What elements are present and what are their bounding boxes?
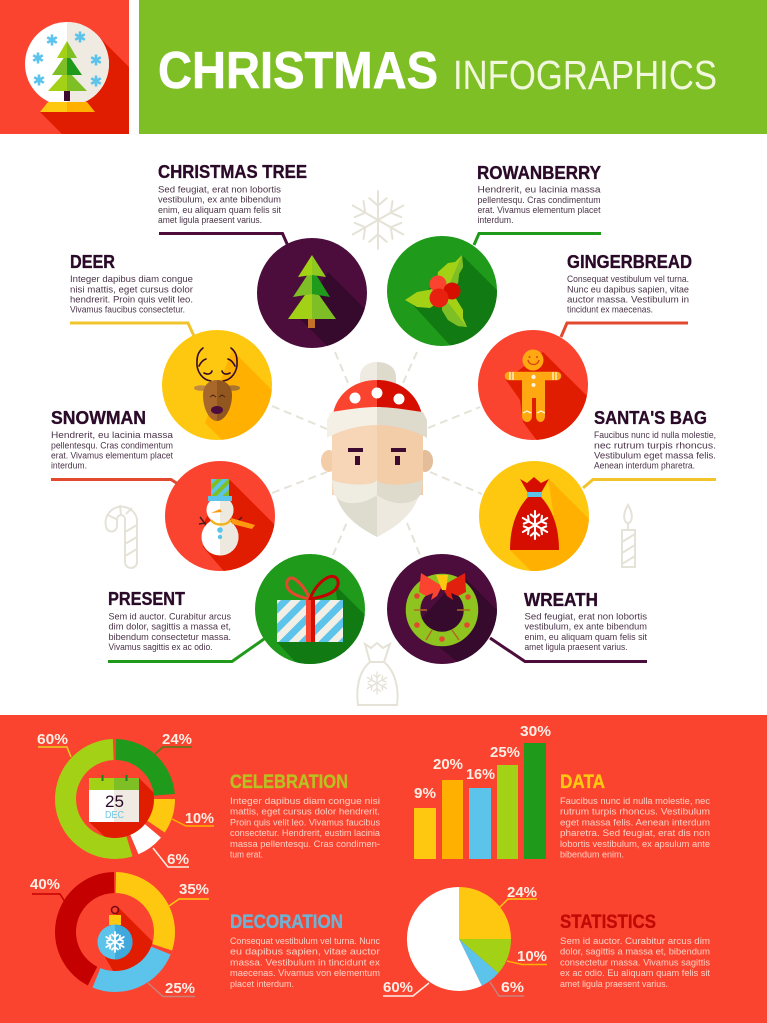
node: christmas tree <box>158 164 367 348</box>
text: decoration <box>230 911 381 990</box>
text block <box>478 185 601 226</box>
text: statistics: Sem id auctor. Curabitur arcus dim <box>560 936 710 947</box>
outline icon: candy cane <box>106 505 137 568</box>
text: data: bibendum enim. <box>560 850 624 860</box>
leader <box>583 480 716 488</box>
text: celebration: mattis, eget cursus dolor hendrerit. <box>230 807 380 818</box>
text: celebration: Integer dapibus diam congue nisi <box>230 796 380 807</box>
labels: 24% <box>507 885 537 901</box>
bar chart: data: 20% <box>433 757 463 773</box>
text block: amet ligula praesent varius. <box>158 215 262 226</box>
text block: Vivamus faucibus consectetur. <box>70 305 185 316</box>
bar chart: data: 9% <box>414 786 436 802</box>
text: data: rutrum turpis rhoncus. Vestibulum <box>560 807 710 818</box>
text block: Hendrerit, eu lacinia massa <box>478 185 601 196</box>
text block: Sed feugiat, erat non lobortis <box>158 184 281 196</box>
santa face <box>321 362 433 537</box>
text block: nec rutrum turpis rhoncus. <box>594 440 716 451</box>
heading: PRESENT <box>108 588 186 609</box>
leader <box>70 323 194 336</box>
header: title banner <box>139 0 767 134</box>
text: celebration: tum erat. <box>230 850 263 860</box>
text block: bibendum consectetur massa. <box>108 632 231 643</box>
text block: Consequat vestibulum vel turna. <box>567 274 689 285</box>
text: statistics: amet ligula praesent varius. <box>560 979 668 990</box>
labels: 6% <box>501 980 524 996</box>
pom-pom <box>360 362 377 392</box>
text block: Aenean interdum pharetra. <box>594 461 695 472</box>
icon: gingerbread man <box>509 350 557 422</box>
icon: calendar <box>89 775 139 822</box>
heading: DEER <box>70 251 115 272</box>
text: statistics: dolor, sagittis a massa et, bibendum <box>560 947 710 958</box>
donut chart: celebration <box>38 734 214 868</box>
labels <box>383 885 547 996</box>
header: title banner: INFOGRAPHICS <box>453 52 717 98</box>
dashed connectors <box>272 352 482 555</box>
text block: vestibulum, ex ante bibendum <box>524 622 647 633</box>
text: decoration: Consequat vestibulum vel turna. Nunc <box>230 936 380 947</box>
text block: amet ligula praesent varius. <box>524 642 628 653</box>
text: celebration: CELEBRATION <box>230 771 348 793</box>
node: deer <box>70 254 272 440</box>
icon: gift box <box>277 576 343 642</box>
text: statistics: consectetur massa. Vivamus sagittis <box>560 957 710 968</box>
icon: holly <box>405 255 467 327</box>
bar chart: data: 16% <box>466 767 495 783</box>
bar chart: data: 30% <box>520 724 551 740</box>
text block <box>51 430 174 472</box>
text: data: eget massa felis. Aenean interdum <box>560 817 710 828</box>
text: statistics: ex ac odio. Eu aliquam quam felis sit <box>560 968 710 979</box>
text: data: pharetra. Sed feugiat, erat dis non <box>560 828 710 839</box>
title: CHRISTMAS <box>158 42 438 100</box>
text: decoration: eu dapibus sapien, vitae auctor <box>230 947 381 958</box>
labels <box>30 877 209 997</box>
text: celebration: Proin quis velit leo. Vivamus faucibus <box>230 817 380 828</box>
labels: 10% <box>185 811 214 827</box>
text: statistics: STATISTICS <box>560 911 656 933</box>
heading: CHRISTMAS TREE <box>158 161 307 182</box>
text block: Faucibus nunc id nulla molestie, <box>594 430 716 441</box>
bar chart: data <box>414 724 551 859</box>
labels: 25% <box>165 981 195 997</box>
text: decoration: massa. Vestibulum in tincidunt ex <box>230 957 380 968</box>
header: snow globe panel <box>0 0 129 134</box>
text block: Vivamus sagittis ex ac odio. <box>108 642 212 653</box>
text block: tincidunt ex maecenas. <box>567 305 653 316</box>
heading: SNOWMAN <box>51 407 146 428</box>
labels: 60% <box>383 980 413 996</box>
node: santa's bag <box>479 410 716 571</box>
icon: sack <box>510 477 559 550</box>
text block: interdum. <box>478 215 514 226</box>
text block: nisi mattis, eget cursus dolor <box>70 284 194 295</box>
text block: erat. Vivamus elementum placet <box>51 450 173 462</box>
text: data <box>560 771 710 860</box>
moustache <box>332 480 377 503</box>
icon: tree <box>288 255 336 328</box>
beard <box>332 480 377 537</box>
text block: Sem id auctor. Curabitur arcus <box>108 612 231 622</box>
heading: SANTA'S BAG <box>594 407 707 428</box>
heading: GINGERBREAD <box>567 251 692 272</box>
text block <box>108 612 231 653</box>
ears <box>321 450 337 472</box>
text: data: lobortis vestibulum, ex apsulum ante <box>560 839 710 850</box>
labels <box>37 732 214 868</box>
icon: snowman <box>199 479 255 556</box>
heading: WREATH <box>524 589 598 610</box>
text block: Integer dapibus diam congue <box>70 274 193 285</box>
text block: Nunc eu dapibus sapien, vitae <box>567 284 689 295</box>
icon: bauble <box>98 906 132 960</box>
bar chart: data: 25% <box>490 745 520 761</box>
icon: calendar: 25 <box>105 792 124 811</box>
leader <box>51 480 178 484</box>
labels: 35% <box>179 882 209 898</box>
icon: calendar: DEC <box>105 810 124 821</box>
text block: auctor massa. Vestibulum in <box>567 294 689 306</box>
text block: interdum. <box>51 461 87 472</box>
text: data: Faucibus nunc id nulla molestie, nec <box>560 796 710 807</box>
face <box>332 420 377 495</box>
icon: wreath <box>413 573 471 642</box>
leader <box>561 323 688 337</box>
text: decoration: DECORATION <box>230 911 343 933</box>
outline icon: snowflake <box>353 191 403 249</box>
text: statistics <box>560 911 710 990</box>
text block: hendrerit. Proin quis velit leo. <box>70 294 193 306</box>
text block: enim, eu aliquam quam felis sit <box>158 205 281 216</box>
text block: Sed feugiat, erat non lobortis <box>524 612 647 622</box>
text block: pellentesqu. Cras condimentum <box>51 440 173 451</box>
leader <box>474 234 601 245</box>
icon: snow globe <box>25 20 111 112</box>
text block: Vestibulum eget massa felis. <box>594 450 716 462</box>
text block: enim, eu aliquam quam felis sit <box>524 632 647 643</box>
panel: statistics band <box>0 715 767 1023</box>
text: celebration <box>230 771 381 860</box>
leader <box>159 234 288 246</box>
labels: 6% <box>167 852 189 868</box>
outline icon: sack <box>357 643 398 705</box>
donut chart: decoration <box>30 865 209 999</box>
node: gingerbread <box>478 254 692 440</box>
text: celebration: consectetur. Hendrerit, eustim lacinia <box>230 828 381 839</box>
labels: 10% <box>517 949 547 965</box>
text: decoration: placet interdum. <box>230 979 294 990</box>
text block: Hendrerit, eu lacinia massa <box>51 430 174 441</box>
labels: 40% <box>30 877 60 893</box>
text block <box>567 274 689 316</box>
leader <box>108 639 264 662</box>
text block <box>524 612 647 653</box>
text block <box>70 274 194 316</box>
node: snowman <box>51 410 275 571</box>
text: data: DATA <box>560 771 605 793</box>
text block: dim dolor, sagittis a massa et, <box>108 622 231 633</box>
hat <box>332 380 377 420</box>
node: rowanberry <box>387 166 601 346</box>
labels: 60% <box>37 732 68 748</box>
heading: ROWANBERRY <box>477 162 602 183</box>
text: celebration: massa pellentesqu. Cras condimen- <box>230 839 380 850</box>
eyes <box>348 448 406 465</box>
text block <box>594 430 716 472</box>
icon: deer head <box>194 348 240 421</box>
text block: vestibulum, ex ante bibendum <box>158 195 281 206</box>
outline icon: candle <box>622 505 635 567</box>
text block <box>158 184 281 226</box>
text: decoration: maecenas. Vivamus von elementum <box>230 968 380 979</box>
node: present <box>108 554 365 664</box>
leader <box>490 638 647 662</box>
text block: erat. Vivamus elementum placet <box>478 205 601 216</box>
node: wreath <box>387 554 647 664</box>
labels: 24% <box>162 732 192 748</box>
pie chart: statistics <box>383 885 547 996</box>
text block: pellentesqu. Cras condimentum <box>478 195 601 206</box>
hat band <box>327 407 377 438</box>
